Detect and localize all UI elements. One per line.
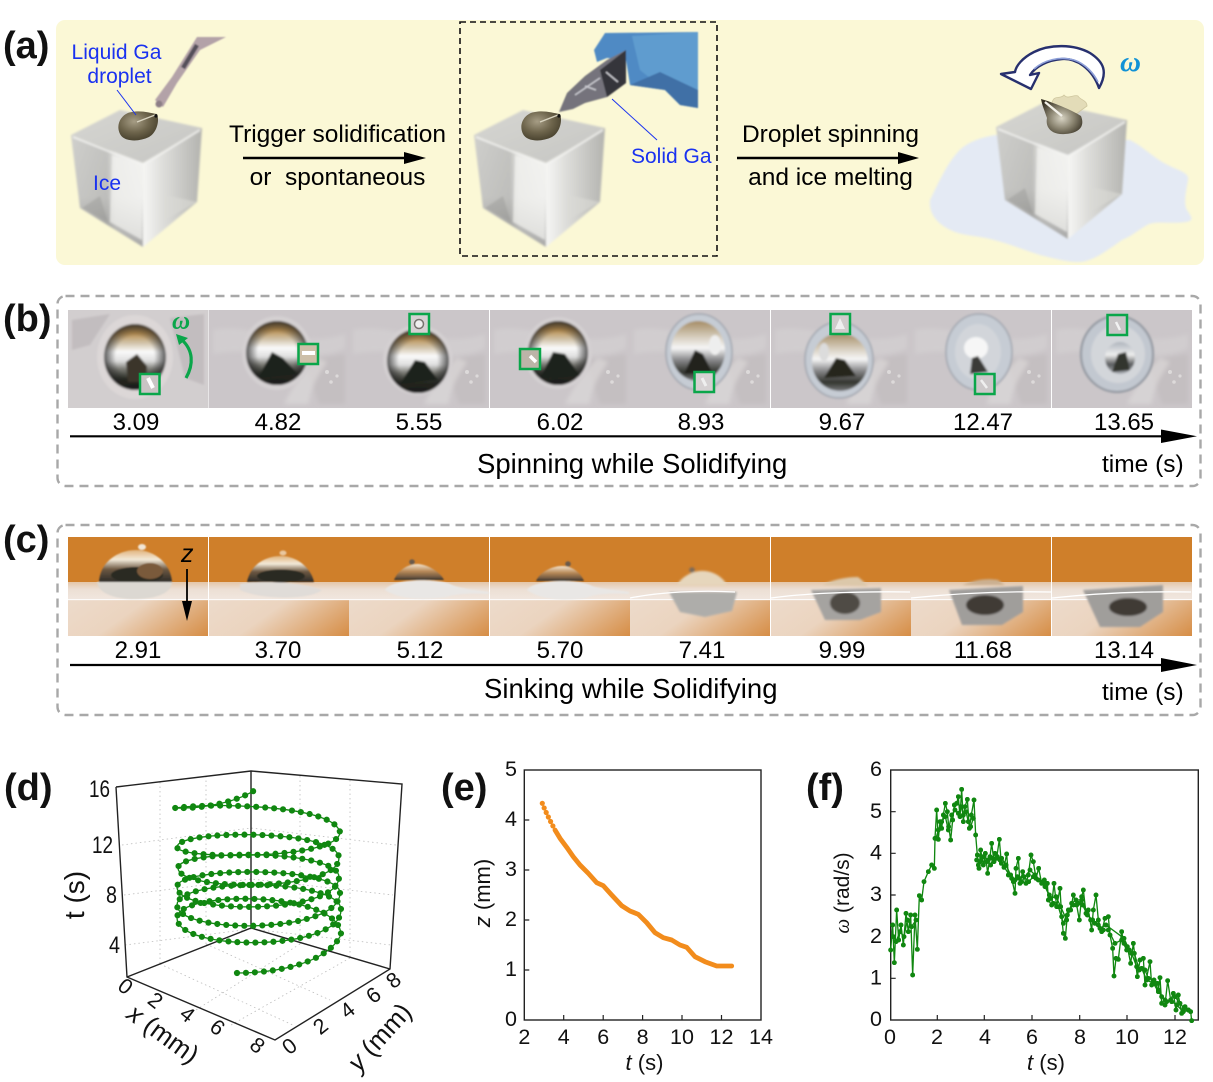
x axis numbers: 2 (931, 1025, 943, 1049)
arrow: time axis (70, 430, 1197, 443)
chart f: angular velocity versus time (830, 757, 1198, 1075)
label: Solid Ga: Solid Ga (631, 145, 712, 168)
panel b label: (b) (3, 298, 52, 340)
axis titles: t (s) (626, 1050, 663, 1075)
axis titles (470, 859, 663, 1075)
x axis labels (113, 973, 269, 1059)
frame 12.47 s (911, 310, 1051, 408)
frame 11.68 s (911, 537, 1051, 636)
text and arrow: droplet spinning: and ice melting (748, 164, 913, 191)
y axis numbers: 3 (505, 857, 517, 881)
x axis numbers: 8 (1074, 1025, 1086, 1049)
green data series (891, 789, 1192, 1021)
y axis numbers (505, 757, 517, 1031)
icon: rotation arrow (1001, 46, 1104, 89)
x axis numbers: 10 (670, 1025, 694, 1049)
time stamps: 13.65 (1094, 409, 1154, 436)
y axis numbers: 3 (870, 882, 882, 906)
icon: melting ice cube with spinning droplet (996, 95, 1127, 239)
dashed box: solid Ga trigger (460, 22, 717, 256)
panel a: schematic of droplet on ice (3, 20, 1204, 265)
frame 5.12 s (349, 537, 489, 636)
y axis labels: 2 (309, 1013, 333, 1040)
frame 8.93 s (630, 310, 770, 408)
time stamps: 8.93 (678, 409, 724, 436)
frame 13.65 s (1052, 310, 1192, 408)
x axis title: x (mm) (120, 997, 205, 1070)
x axis numbers (884, 1025, 1187, 1049)
x axis numbers: 4 (979, 1025, 991, 1049)
chart d: 3D helical trajectory (59, 771, 418, 1079)
time stamps: 13.14 (1094, 637, 1154, 664)
panel d label: (d) (4, 767, 53, 809)
time stamps: 2.91 (115, 637, 161, 664)
x axis labels: 2 (143, 987, 167, 1014)
y axis labels (278, 967, 406, 1060)
orange data curve (542, 803, 732, 966)
y axis numbers: 2 (505, 907, 517, 931)
label: Liquid Ga droplet: droplet (87, 65, 152, 88)
caption: spinning while solidifying: Spinning while Solidifying (477, 448, 787, 479)
time stamps (115, 637, 1154, 664)
time stamps: 12.47 (953, 409, 1013, 436)
time stamps: 9.99 (819, 637, 865, 664)
t axis labels (89, 776, 120, 959)
z direction arrow and label (180, 540, 194, 621)
x axis numbers: 14 (749, 1025, 773, 1049)
axis titles: t (s) (1027, 1050, 1065, 1075)
label: Ice: Ice (93, 172, 121, 195)
x axis numbers: 12 (710, 1025, 733, 1049)
frame 3.70 s (209, 537, 349, 636)
icon: green rotation arrow with omega: ω (172, 308, 190, 335)
frame 5.70 s (490, 537, 630, 636)
axis titles: z (mm) (470, 859, 495, 928)
helix data curve (175, 790, 341, 973)
y axis numbers: 2 (870, 924, 882, 948)
icon: green rotation arrow with omega (172, 308, 191, 378)
x axis numbers: 2 (518, 1025, 530, 1049)
time stamps: 5.12 (397, 637, 443, 664)
t axis labels: 12 (92, 832, 113, 859)
caption: sinking while solidifying: Sinking while Solidifying (484, 673, 778, 704)
y axis numbers: 0 (505, 1007, 517, 1031)
t axis title: t (s) (59, 871, 90, 919)
text and arrow: droplet spinning: Droplet spinning (742, 121, 919, 148)
x axis labels: 8 (245, 1032, 269, 1059)
y axis labels: 0 (278, 1033, 302, 1060)
image sequence: top view frames (68, 310, 1192, 408)
y axis numbers: 0 (870, 1007, 882, 1031)
panel f label: (f) (806, 767, 844, 809)
text and arrow: trigger solidification (229, 121, 446, 191)
y axis numbers (870, 757, 882, 1031)
x axis numbers: 8 (637, 1025, 649, 1049)
icon: pipette (155, 37, 226, 108)
text and arrow: droplet spinning (737, 121, 919, 191)
frame 9.99 s (771, 537, 911, 636)
x axis numbers: 6 (1026, 1025, 1038, 1049)
label: omega: ω (1120, 46, 1141, 78)
label: time (s): time (s) (1102, 451, 1184, 478)
label: Solid Ga (612, 99, 712, 168)
image sequence: side view frames (68, 537, 1192, 636)
time stamps: 11.68 (954, 637, 1012, 664)
time stamps: 7.41 (679, 637, 725, 664)
y axis numbers: 4 (505, 807, 517, 831)
frame 3.09 s (68, 310, 208, 408)
x axis numbers: 10 (1115, 1025, 1139, 1049)
x axis numbers: 4 (558, 1025, 570, 1049)
y axis numbers: 4 (870, 840, 882, 864)
label: Liquid Ga droplet: Liquid Ga (72, 41, 162, 64)
t axis labels: 16 (89, 776, 110, 803)
panel a label: (a) (3, 25, 49, 67)
time stamps: 3.09 (113, 409, 159, 436)
time stamps: 9.67 (819, 409, 865, 436)
panel b: spinning while solidifying (58, 296, 1200, 486)
x axis labels: 6 (205, 1014, 229, 1041)
y axis labels: 4 (336, 997, 360, 1024)
label: time (s): time (s) (1102, 679, 1184, 706)
time stamps: 6.02 (537, 409, 583, 436)
y axis numbers: 5 (870, 799, 882, 823)
icon: ice cube with droplet and solid Ga (474, 32, 698, 247)
icon: ice cube with liquid droplet (71, 110, 202, 247)
x axis numbers: 6 (597, 1025, 609, 1049)
y axis numbers: 5 (505, 757, 517, 781)
y axis labels: 8 (382, 967, 406, 994)
y axis numbers: 6 (870, 757, 882, 781)
time stamps (113, 409, 1154, 436)
t axis labels: 8 (106, 882, 117, 909)
panel c: sinking while solidifying (58, 525, 1200, 715)
time stamps: 3.70 (255, 637, 301, 664)
axis titles (830, 852, 1065, 1075)
frame 13.14 s (1052, 537, 1192, 636)
y axis labels: 6 (362, 982, 386, 1009)
time stamps: 4.82 (255, 409, 301, 436)
time stamps: 5.55 (396, 409, 442, 436)
y axis title: y (mm) (340, 997, 418, 1079)
x axis numbers (518, 1025, 773, 1049)
text and arrow: trigger solidification: or spontaneous (250, 164, 425, 191)
x axis labels: 4 (175, 1001, 199, 1028)
y axis numbers: 1 (870, 966, 882, 990)
axis titles: ω (rad/s) (830, 852, 854, 934)
frame 4.82 s (209, 310, 349, 408)
x axis labels: 0 (113, 973, 137, 1000)
t axis labels: 4 (109, 932, 120, 959)
y axis numbers: 1 (505, 957, 517, 981)
label: Liquid Ga droplet (72, 41, 162, 115)
frame 7.41 s (630, 537, 770, 636)
panel c label: (c) (3, 519, 49, 561)
arrow: time axis (70, 658, 1197, 672)
frame 6.02 s (490, 310, 630, 408)
x axis numbers: 12 (1163, 1025, 1187, 1049)
z direction arrow and label: z (180, 540, 194, 568)
icon: meltwater puddle (930, 135, 1191, 262)
frame 9.67 s (771, 310, 911, 408)
frame 5.55 s (349, 310, 489, 408)
x axis numbers: 0 (884, 1025, 896, 1049)
time stamps: 5.70 (537, 637, 583, 664)
panel e label: (e) (441, 767, 487, 809)
3D axes box (116, 771, 402, 1040)
frame 2.91 s (68, 537, 208, 636)
text and arrow: trigger solidification: Trigger solidification (229, 121, 446, 148)
chart e: depth versus time (470, 757, 773, 1075)
